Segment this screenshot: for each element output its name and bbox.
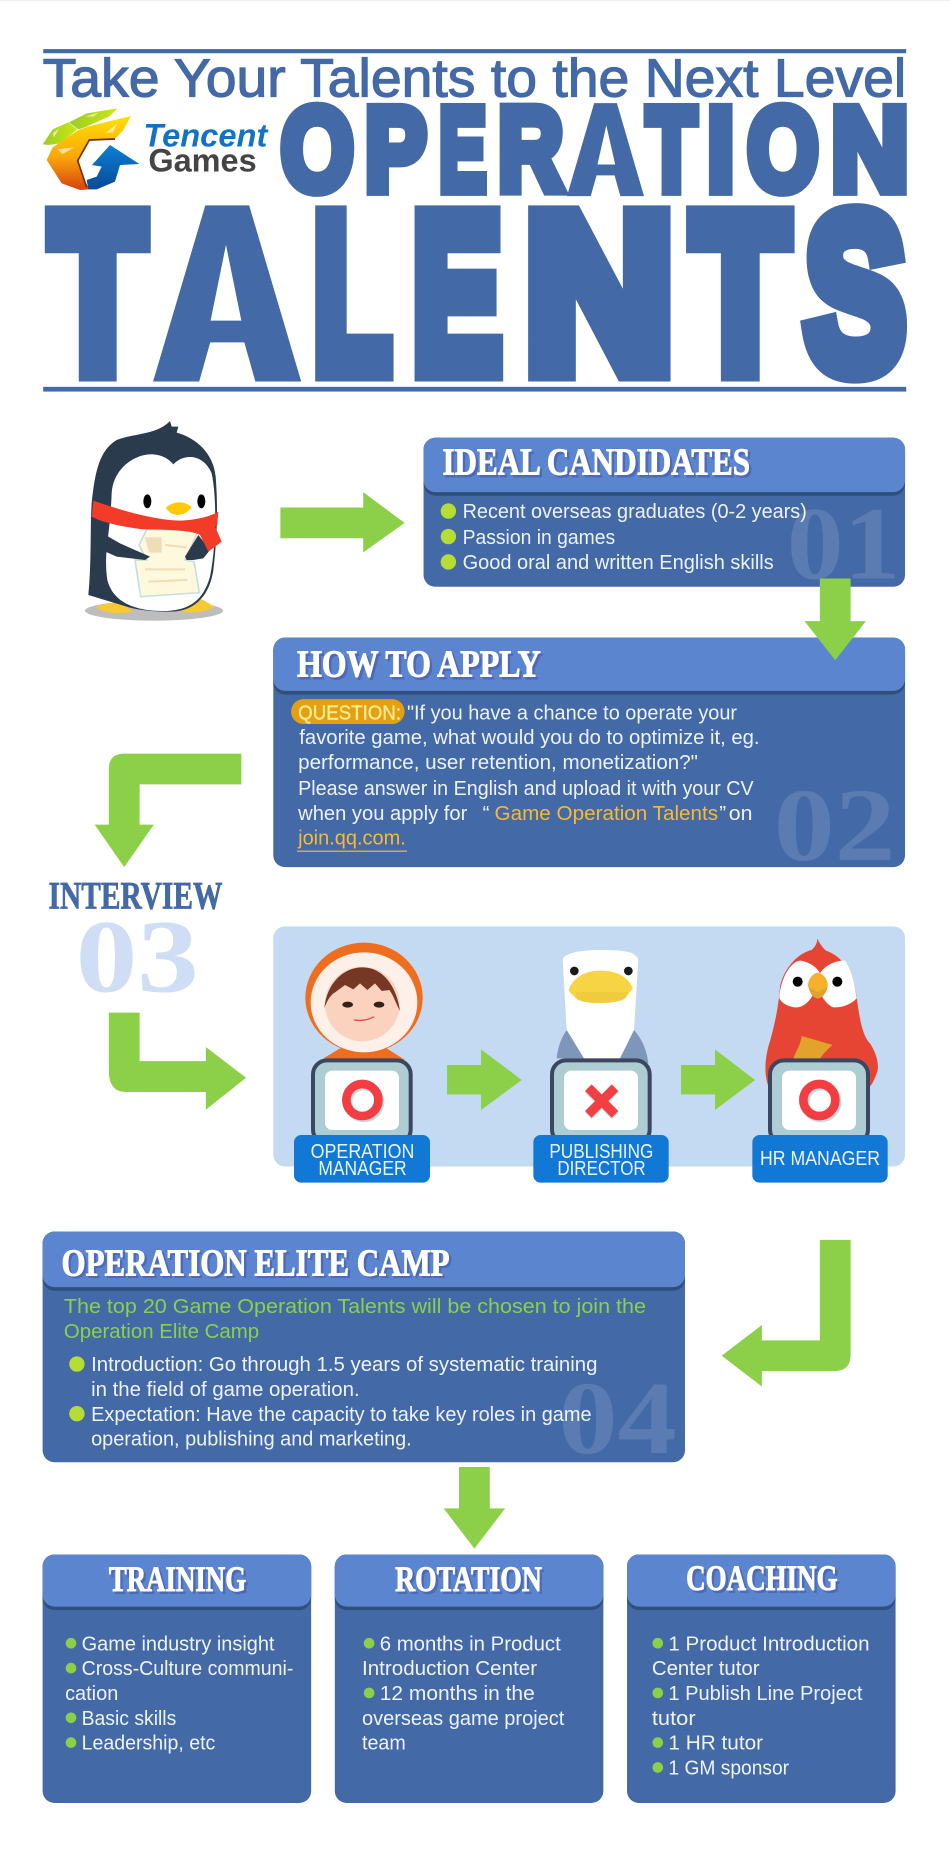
list: coaching items: 1 Product Introduction	[668, 1632, 870, 1655]
title: TALENTS: A	[162, 170, 293, 418]
text: application instructions: join.qq.com.	[297, 827, 406, 850]
heading: rotation: ROTATION	[395, 1559, 542, 1599]
text: camp intro: Operation Elite Camp	[64, 1320, 259, 1343]
interviewer: publishing director	[533, 950, 669, 1183]
title: OPERATION: O	[747, 84, 818, 216]
interviewer: publishing director: PUBLISHING	[549, 1140, 653, 1163]
panel: interview background	[273, 926, 905, 1166]
title: OPERATION: I	[707, 84, 734, 216]
title: tagline: Take Your Talents to the Next Level	[43, 48, 906, 108]
number 01: 01	[787, 486, 900, 602]
list: rotation items: 12 months in the	[380, 1682, 535, 1705]
list: training items: cation	[65, 1682, 118, 1705]
interviewer: hr manager	[752, 938, 888, 1183]
list: coaching items: 1 Publish Line Project	[668, 1682, 863, 1705]
panel: ideal candidates	[424, 438, 905, 602]
list: training items	[65, 1632, 293, 1755]
text: application instructions: "If you have a chance to operate your	[407, 701, 737, 724]
text: application instructions	[297, 701, 760, 852]
text: camp intro: The top 20 Game Operation Talents will be chosen to join the	[64, 1295, 646, 1318]
list: candidate requirements: Good oral and written English skills	[463, 551, 774, 574]
heading: coaching: COACHING	[686, 1558, 838, 1598]
list: coaching items: 1 GM sponsor	[668, 1757, 789, 1780]
logo: Tencent Games: Games	[148, 142, 257, 178]
arrow: elite camp to programs	[444, 1467, 505, 1549]
title: TALENTS: L	[313, 170, 391, 418]
text: application instructions: “	[483, 802, 490, 825]
list: training items: Leadership, etc	[82, 1732, 215, 1755]
list: camp details: Introduction: Go through 1.5 years of systematic training	[91, 1353, 597, 1376]
title: OPERATION: N	[831, 84, 909, 216]
heading: ideal candidates: IDEAL CANDIDATES	[442, 441, 750, 483]
panel: rotation	[335, 1555, 603, 1803]
list: training items: Cross-Culture communi-	[82, 1657, 293, 1680]
heading: how to apply: HOW TO APPLY	[297, 644, 541, 686]
title: TALENTS: S	[805, 170, 905, 418]
panel: training	[43, 1555, 311, 1803]
list: candidate requirements: Recent overseas graduates (0-2 years)	[463, 500, 807, 523]
heading: training: TRAINING	[111, 1562, 248, 1602]
text: application instructions: when you apply for	[297, 802, 467, 825]
title: TALENTS: T	[692, 170, 788, 418]
arrow: interview elbow	[109, 1013, 246, 1110]
number 03: 03	[76, 898, 199, 1014]
interviewer: operation manager: OPERATION	[311, 1140, 414, 1163]
title: OPERATION: T	[647, 84, 696, 216]
interviewer: publishing director: DIRECTOR	[557, 1157, 646, 1180]
title: OPERATION: A	[571, 84, 640, 216]
title: OPERATION: R	[498, 84, 563, 216]
interviewer: operation manager	[294, 943, 430, 1183]
arrow: operation manager to publishing director	[447, 1049, 522, 1110]
logo: Tencent Games	[43, 108, 269, 190]
title: TALENTS: T	[51, 170, 144, 418]
arrow: penguin to ideal candidates	[280, 492, 405, 552]
heading: interview: INTERVIEW	[49, 875, 222, 918]
list: coaching items: Center tutor	[652, 1657, 760, 1680]
panel: coaching	[627, 1555, 896, 1803]
heading: ideal candidates: IDEAL CANDIDATES	[445, 444, 752, 486]
list: camp details: operation, publishing and marketing.	[91, 1428, 412, 1451]
arrow: ideal candidates to how to apply	[804, 579, 866, 660]
list: camp details: Expectation: Have the capacity to take key roles in game	[91, 1403, 592, 1426]
text: application instructions: Please answer in English and upload it with your CV	[298, 777, 754, 800]
list: coaching items: 1 HR tutor	[668, 1732, 763, 1755]
heading: rotation: ROTATION	[398, 1562, 544, 1602]
text: application instructions: performance, user retention, monetization?"	[298, 751, 698, 774]
heading: operation elite camp: OPERATION ELITE CAMP	[62, 1242, 450, 1284]
panel: how to apply	[273, 638, 905, 883]
logo: Tencent Games: Tencent	[143, 118, 269, 154]
arrow: publishing director to hr manager	[681, 1049, 755, 1110]
list: rotation items: 6 months in Product	[380, 1632, 561, 1655]
list: candidate requirements: Passion in games	[463, 526, 615, 549]
title: OPERATION: O	[281, 84, 354, 216]
title: TALENTS: E	[413, 170, 502, 418]
text: application instructions: ”	[719, 802, 726, 825]
list: training items: Basic skills	[82, 1707, 176, 1730]
text: camp intro	[64, 1295, 646, 1343]
panel: operation elite camp	[43, 1232, 685, 1476]
arrow: interview to elite camp	[722, 1240, 851, 1387]
text: application instructions: on	[729, 802, 752, 825]
header: title block	[43, 48, 909, 418]
interviewer: hr manager: HR MANAGER	[760, 1147, 880, 1170]
number 02: 02	[774, 767, 896, 883]
number 04: 04	[558, 1360, 677, 1476]
heading: operation elite camp: OPERATION ELITE CAMP	[64, 1245, 452, 1287]
heading: how to apply: HOW TO APPLY	[299, 646, 543, 688]
title: TALENTS: N	[525, 170, 674, 418]
icon: penguin with paper	[85, 421, 223, 621]
list: camp details: in the field of game operation.	[91, 1378, 360, 1401]
arrow: how to apply to interview	[95, 754, 241, 867]
list: rotation items: Introduction Center	[362, 1657, 537, 1680]
list: rotation items	[362, 1632, 565, 1755]
list: training items: Game industry insight	[82, 1632, 275, 1655]
question badge: QUESTION:	[298, 701, 401, 724]
list: camp details	[69, 1353, 597, 1451]
list: candidate requirements	[441, 500, 807, 574]
list: rotation items: overseas game project	[362, 1707, 565, 1730]
text: application instructions: favorite game, what would you do to optimize it, eg.	[299, 726, 760, 749]
heading: coaching: COACHING	[689, 1560, 840, 1600]
title: OPERATION: P	[365, 84, 426, 216]
title: OPERATION: E	[439, 84, 486, 216]
list: rotation items: team	[362, 1732, 406, 1755]
list: coaching items	[652, 1632, 870, 1780]
text: application instructions: Game Operation Talents	[495, 802, 718, 825]
interviewer: operation manager: MANAGER	[318, 1157, 407, 1180]
heading: training: TRAINING	[109, 1559, 246, 1599]
list: coaching items: tutor	[652, 1707, 696, 1730]
